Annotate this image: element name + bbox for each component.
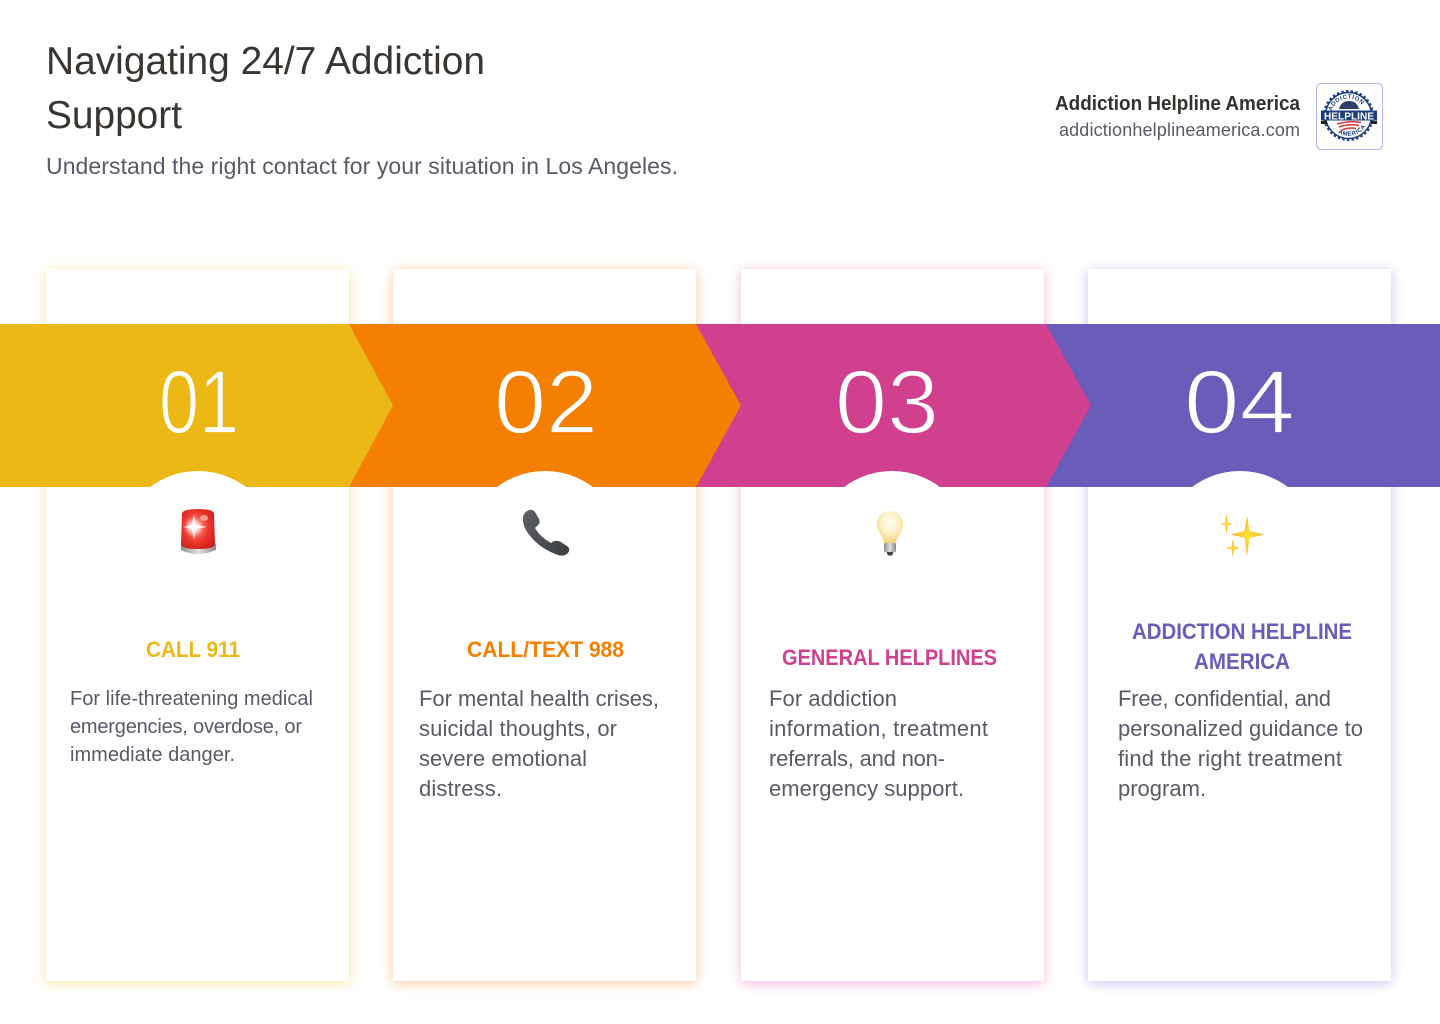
- text: addiction helpline america description: find the right treatment: [1118, 746, 1342, 771]
- icon circle 3: [812, 471, 972, 631]
- icon: red siren: [181, 509, 216, 554]
- title: Navigating 24/7 Addiction: [46, 40, 485, 83]
- brand logo: [1316, 83, 1383, 150]
- panel: card 3 background: [741, 269, 1044, 983]
- brand logo: HELPLINE: [1324, 112, 1374, 122]
- text: general helplines description: emergency support.: [769, 776, 964, 801]
- text: addiction helpline america description: [1118, 686, 1363, 801]
- heading: call/text 988: CALL/TEXT 988: [467, 637, 624, 662]
- title: Support: [46, 94, 182, 137]
- text: call/text 988 description: suicidal thoughts, or: [419, 716, 617, 741]
- brand name and website: Addiction Helpline America: [1055, 93, 1301, 115]
- panel: card 1 background: [46, 269, 349, 983]
- brand name and website: addictionhelplineamerica.com: [1059, 120, 1300, 140]
- heading: addiction helpline america: AMERICA: [1194, 649, 1290, 674]
- text: general helplines description: referrals, and non-: [769, 746, 945, 771]
- arrow band: step 3: [696, 324, 1091, 487]
- text: call/text 988 description: For mental health crises,: [419, 686, 659, 711]
- number 04: 04: [1184, 353, 1295, 453]
- text: general helplines description: information, treatment: [769, 716, 988, 741]
- heading: general helplines: GENERAL HELPLINES: [782, 645, 997, 670]
- text: addiction helpline america description: Free, confidential, and: [1118, 686, 1331, 711]
- brand logo: AMERICA: [1338, 125, 1366, 136]
- brand logo: ADDICTION: [1328, 94, 1364, 110]
- panel: card 4 background: [1088, 269, 1391, 983]
- text: call 911 description: emergencies, overdose, or: [70, 716, 302, 738]
- text: call/text 988 description: severe emotional: [419, 746, 587, 771]
- text: general helplines description: For addiction: [769, 686, 897, 711]
- arrow band: step 4: [1046, 324, 1440, 487]
- icon: sparkles: [1221, 514, 1264, 557]
- subtitle: Understand the right contact for your situation in Los Angeles.: [46, 153, 678, 179]
- number 02: 02: [494, 353, 598, 453]
- panel: card 2 background: [393, 269, 696, 983]
- number 01: 01: [159, 353, 239, 453]
- icon circle 1: [118, 471, 278, 631]
- arrow band: step 1: [0, 324, 393, 487]
- text: addiction helpline america description: program.: [1118, 776, 1206, 801]
- arrow band: step 2: [349, 324, 741, 487]
- text: call/text 988 description: [419, 686, 659, 801]
- text: call 911 description: [70, 688, 313, 766]
- text: call/text 988 description: distress.: [419, 776, 502, 801]
- text: general helplines description: [769, 686, 988, 801]
- heading: addiction helpline america: [1132, 619, 1352, 674]
- brand name and website: [1055, 93, 1301, 140]
- icon: telephone receiver: [523, 510, 569, 556]
- heading: call 911: CALL 911: [146, 637, 240, 662]
- icon circle 4: [1160, 471, 1320, 631]
- icon circle 2: [465, 471, 625, 631]
- text: call 911 description: For life-threatening medical: [70, 688, 313, 710]
- number 03: 03: [835, 353, 939, 453]
- text: addiction helpline america description: personalized guidance to: [1118, 716, 1363, 741]
- icon: light bulb: [877, 511, 903, 556]
- title: [46, 40, 485, 137]
- text: call 911 description: immediate danger.: [70, 744, 235, 766]
- heading: addiction helpline america: ADDICTION HELPLINE: [1132, 619, 1352, 644]
